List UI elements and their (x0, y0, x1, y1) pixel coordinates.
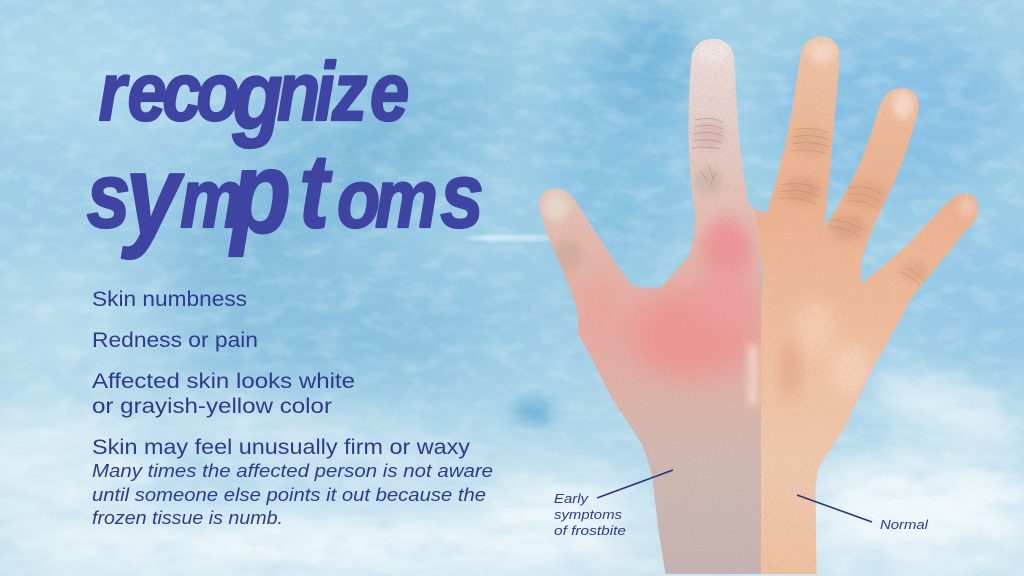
symptom list (92, 288, 493, 528)
symptom: redness: Redness or pain (92, 329, 258, 352)
title: reco (99, 46, 239, 138)
title: g (232, 41, 283, 148)
symptom: colour change (92, 370, 355, 418)
italic note: Many times the affected person is not aware (92, 461, 493, 481)
symptom: colour change: Affected skin looks white (92, 370, 355, 393)
knuckle shading (554, 120, 929, 284)
title: y (121, 130, 184, 260)
title: t (299, 132, 332, 250)
symptom: numbness: Skin numbness (92, 288, 247, 311)
knuckle creases (692, 118, 925, 286)
italic note (92, 461, 493, 528)
title: p (228, 127, 291, 257)
italic note: until someone else points it out because the (92, 485, 486, 505)
callout: early symptoms of frostbite (554, 470, 673, 538)
title (87, 41, 484, 260)
callout: early symptoms of frostbite: Early (554, 491, 590, 506)
hand right half: normal skin (755, 30, 1000, 574)
italic note: frozen tissue is numb. (92, 508, 283, 528)
hand left half: early symptoms skin (530, 30, 761, 574)
title: nize (277, 46, 409, 138)
callout: early symptoms of frostbite: symptoms (554, 507, 623, 522)
callout: normal: Normal (880, 517, 929, 532)
hand photo: frostbite comparison (530, 30, 1000, 574)
title: om (337, 153, 438, 245)
callout: normal (797, 495, 929, 532)
title: s (87, 145, 130, 247)
title: s (440, 145, 484, 247)
symptom: colour change: or grayish-yellow color (92, 395, 332, 418)
callout: early symptoms of frostbite: of frostbite (554, 523, 626, 538)
symptom: firm or waxy: Skin may feel unusually firm or waxy (92, 436, 471, 459)
title: m (180, 153, 243, 245)
